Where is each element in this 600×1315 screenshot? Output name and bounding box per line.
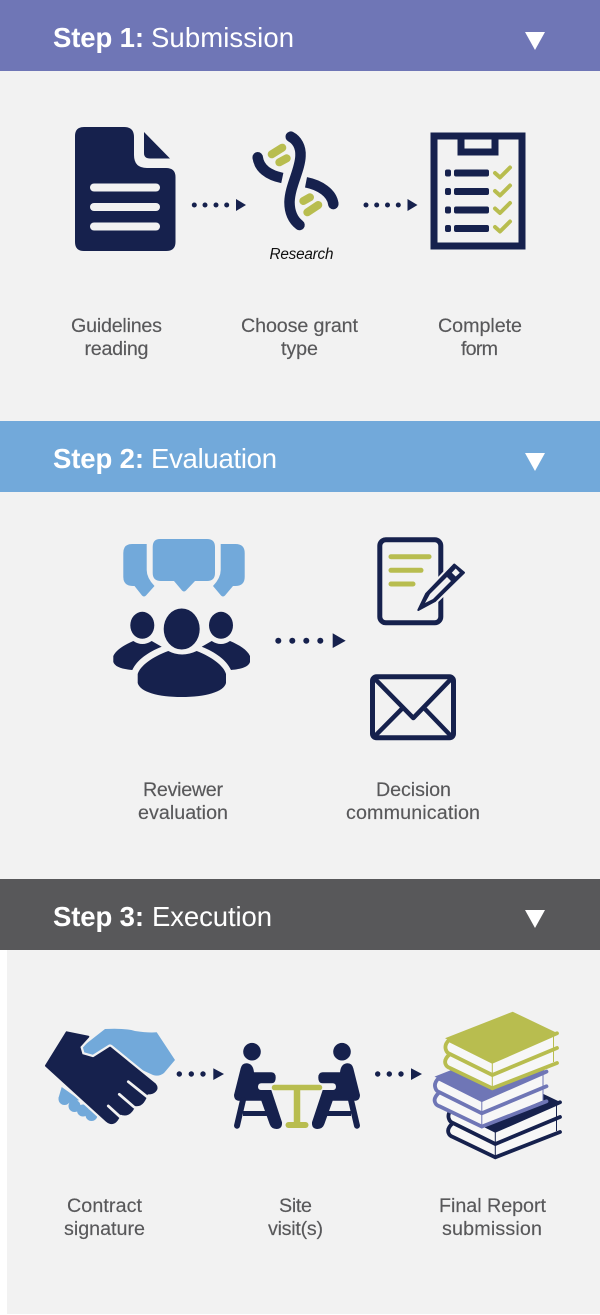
label: Choose grant type: Choose grant — [241, 315, 359, 337]
caption: Research: Research — [270, 246, 334, 263]
label: Complete form — [438, 315, 522, 360]
person: left — [234, 1043, 282, 1129]
label: Guidelines reading: Guidelines — [71, 315, 162, 337]
label: Final Report submission: submission — [442, 1218, 542, 1240]
icon: document — [75, 127, 176, 251]
label: Contract signature: signature — [64, 1218, 145, 1240]
header: step 1: Submission — [151, 22, 294, 53]
person: right — [312, 1043, 360, 1129]
header: step 2: Evaluation — [151, 443, 277, 474]
label: Reviewer evaluation: Reviewer — [143, 779, 223, 801]
book: navy — [448, 1081, 561, 1157]
label: Decision communication: Decision — [376, 779, 451, 801]
label: Guidelines reading: reading — [84, 338, 148, 360]
icon: handshake — [46, 1029, 175, 1123]
arrow — [192, 199, 246, 211]
book: purple — [434, 1050, 547, 1127]
icon: site visit meeting — [234, 1043, 360, 1129]
header: step 3: Step 3: — [53, 901, 144, 932]
header: step 3: Execution — [152, 901, 272, 932]
label: Choose grant type: type — [281, 338, 318, 360]
label: Site visit(s): Site — [279, 1195, 312, 1217]
header: step 1: Step 1: — [53, 22, 144, 53]
label: Contract signature: Contract — [67, 1195, 143, 1217]
icon: stack of books — [434, 1012, 561, 1157]
icon: reviewers with speech bubbles — [113, 539, 250, 697]
label: Contract signature — [64, 1195, 145, 1240]
arrow — [375, 1068, 422, 1080]
label: Complete form: form — [461, 338, 498, 360]
icon: clipboard form — [434, 136, 522, 246]
book: green — [445, 1012, 558, 1088]
arrow — [275, 633, 346, 648]
label: Decision communication: communication — [346, 802, 480, 824]
header: step 2: Step 2: — [53, 443, 144, 474]
label: Complete form: Complete — [438, 315, 522, 337]
arrow — [364, 199, 418, 211]
label: Reviewer evaluation: evaluation — [138, 802, 228, 824]
arrow — [177, 1068, 224, 1080]
label: Site visit(s): visit(s) — [268, 1218, 323, 1240]
icon: document with pen — [380, 540, 464, 623]
label: Final Report submission: Final Report — [439, 1195, 547, 1217]
label: Final Report submission — [439, 1195, 547, 1240]
label: Decision communication — [346, 779, 480, 824]
label: Guidelines reading — [71, 315, 162, 360]
icon: envelope — [372, 677, 454, 738]
header: step 2 — [0, 421, 600, 492]
label: Reviewer evaluation — [138, 779, 228, 824]
header: step 3 — [0, 879, 600, 950]
label: Site visit(s) — [268, 1195, 323, 1240]
table — [274, 1088, 320, 1125]
label: Choose grant type — [241, 315, 359, 360]
icon: DNA research — [258, 137, 334, 263]
header: step 1 — [0, 0, 600, 71]
